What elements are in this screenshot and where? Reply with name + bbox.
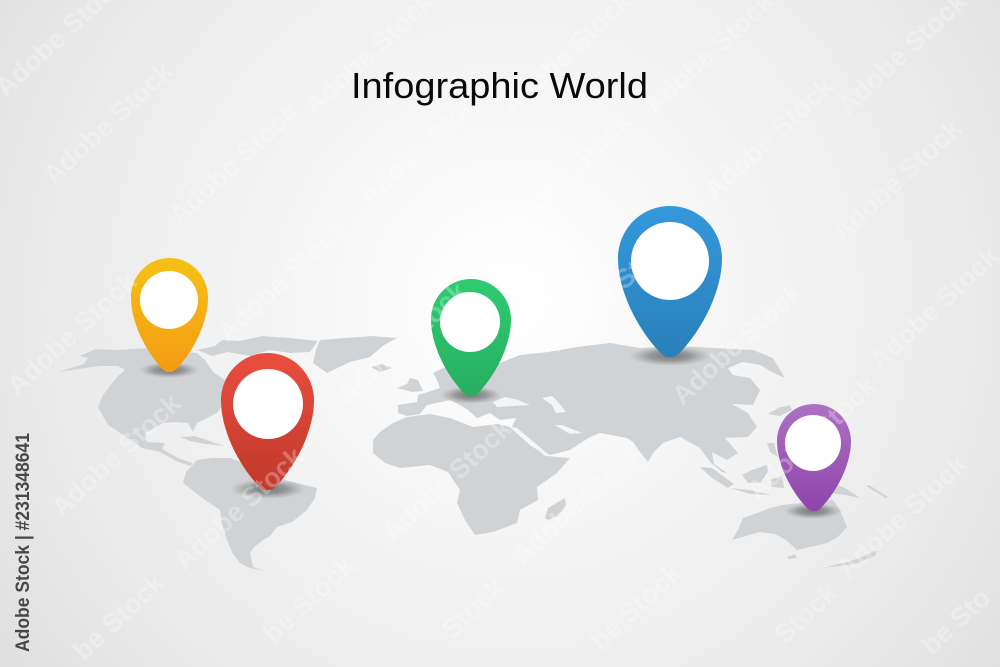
watermarks: Adobe Stock — [506, 436, 648, 571]
seas over the map — [493, 396, 582, 456]
pin circle: green — [440, 292, 500, 352]
pin body: blue — [618, 206, 722, 357]
pin body: yellow — [131, 258, 208, 372]
watermarks: Adobe Stock — [376, 413, 518, 548]
pin circle: yellow — [140, 271, 198, 329]
map: Tasmania — [787, 554, 797, 559]
map: United Kingdom — [397, 378, 423, 392]
sea: Caspian Sea — [542, 396, 566, 413]
pin circle: blue — [631, 222, 709, 300]
map: Eurasia — [398, 343, 785, 473]
watermarks: Adobe Stock — [211, 213, 353, 348]
map: North America — [58, 348, 232, 466]
map: Greenland — [313, 336, 397, 373]
map: Borneo — [742, 465, 768, 483]
watermarks: Adobe Stock — [45, 388, 187, 523]
watermarks: Adobe Stock — [741, 371, 883, 506]
map: Sulawesi — [770, 476, 784, 488]
pin: yellow — [131, 258, 208, 378]
sea: Red Sea band — [512, 427, 548, 456]
map: Philippines — [767, 443, 778, 457]
watermarks: Adobe Stock — [698, 71, 840, 206]
map: Africa — [373, 414, 570, 535]
watermarks: Adobe Stock — [831, 449, 973, 584]
pin: blue — [618, 206, 722, 366]
pin body: green — [431, 279, 511, 396]
map: Australia — [732, 500, 847, 550]
pin shadow: red — [230, 479, 306, 499]
map: Japan — [768, 405, 792, 416]
watermarks: be Sto — [915, 582, 996, 661]
watermarks: Adobe Stock — [541, 223, 683, 358]
map: Caribbean islands — [180, 436, 225, 446]
pin: green — [431, 279, 511, 404]
watermarks: Adobe Stock — [1, 266, 143, 401]
map: Sumatra — [700, 467, 734, 488]
map: Arctic islands — [197, 336, 318, 356]
map: Madagascar — [545, 498, 566, 520]
watermarks: Adobe Stock — [353, 78, 495, 213]
watermarks: Adobe Stock — [666, 276, 808, 411]
pin shadow: green — [440, 386, 502, 404]
stock id text: Adobe Stock | #231348641 — [13, 433, 34, 652]
watermarks: Stock — [436, 572, 511, 645]
pin: purple — [777, 404, 851, 519]
map: Java — [730, 488, 772, 495]
watermarks: Adobe Stock — [37, 56, 179, 191]
watermarks: be Stock — [584, 557, 688, 656]
pin body: red — [221, 353, 314, 490]
watermarks: be Stock — [257, 550, 361, 649]
world map — [58, 336, 888, 571]
sea: Black Sea — [493, 397, 530, 407]
map: New Guinea — [820, 480, 860, 498]
map: Pacific islands — [866, 485, 888, 498]
pin: red — [221, 353, 314, 499]
watermarks: Adobe Stock — [826, 113, 968, 248]
watermarks: Adobe Stock — [331, 276, 473, 411]
map: South America — [183, 458, 317, 571]
map: Iceland — [371, 364, 392, 372]
watermarks: Adobe Stock — [163, 96, 305, 231]
pin shadow: yellow — [139, 362, 199, 378]
pin body: purple — [777, 404, 851, 511]
pin shadow: blue — [629, 346, 711, 366]
title: Infographic World — [351, 65, 648, 106]
pin circle: red — [233, 369, 303, 439]
sea: Persian Gulf — [555, 425, 582, 434]
watermarks: be Stock — [67, 567, 171, 666]
pin shadow: purple — [784, 503, 842, 519]
watermarks: Adobe Stock — [168, 441, 310, 576]
watermarks: Stock — [769, 577, 844, 650]
pin circle: purple — [785, 415, 841, 471]
watermarks: Adobe Stock — [496, 106, 638, 241]
map: New Zealand — [823, 550, 877, 568]
